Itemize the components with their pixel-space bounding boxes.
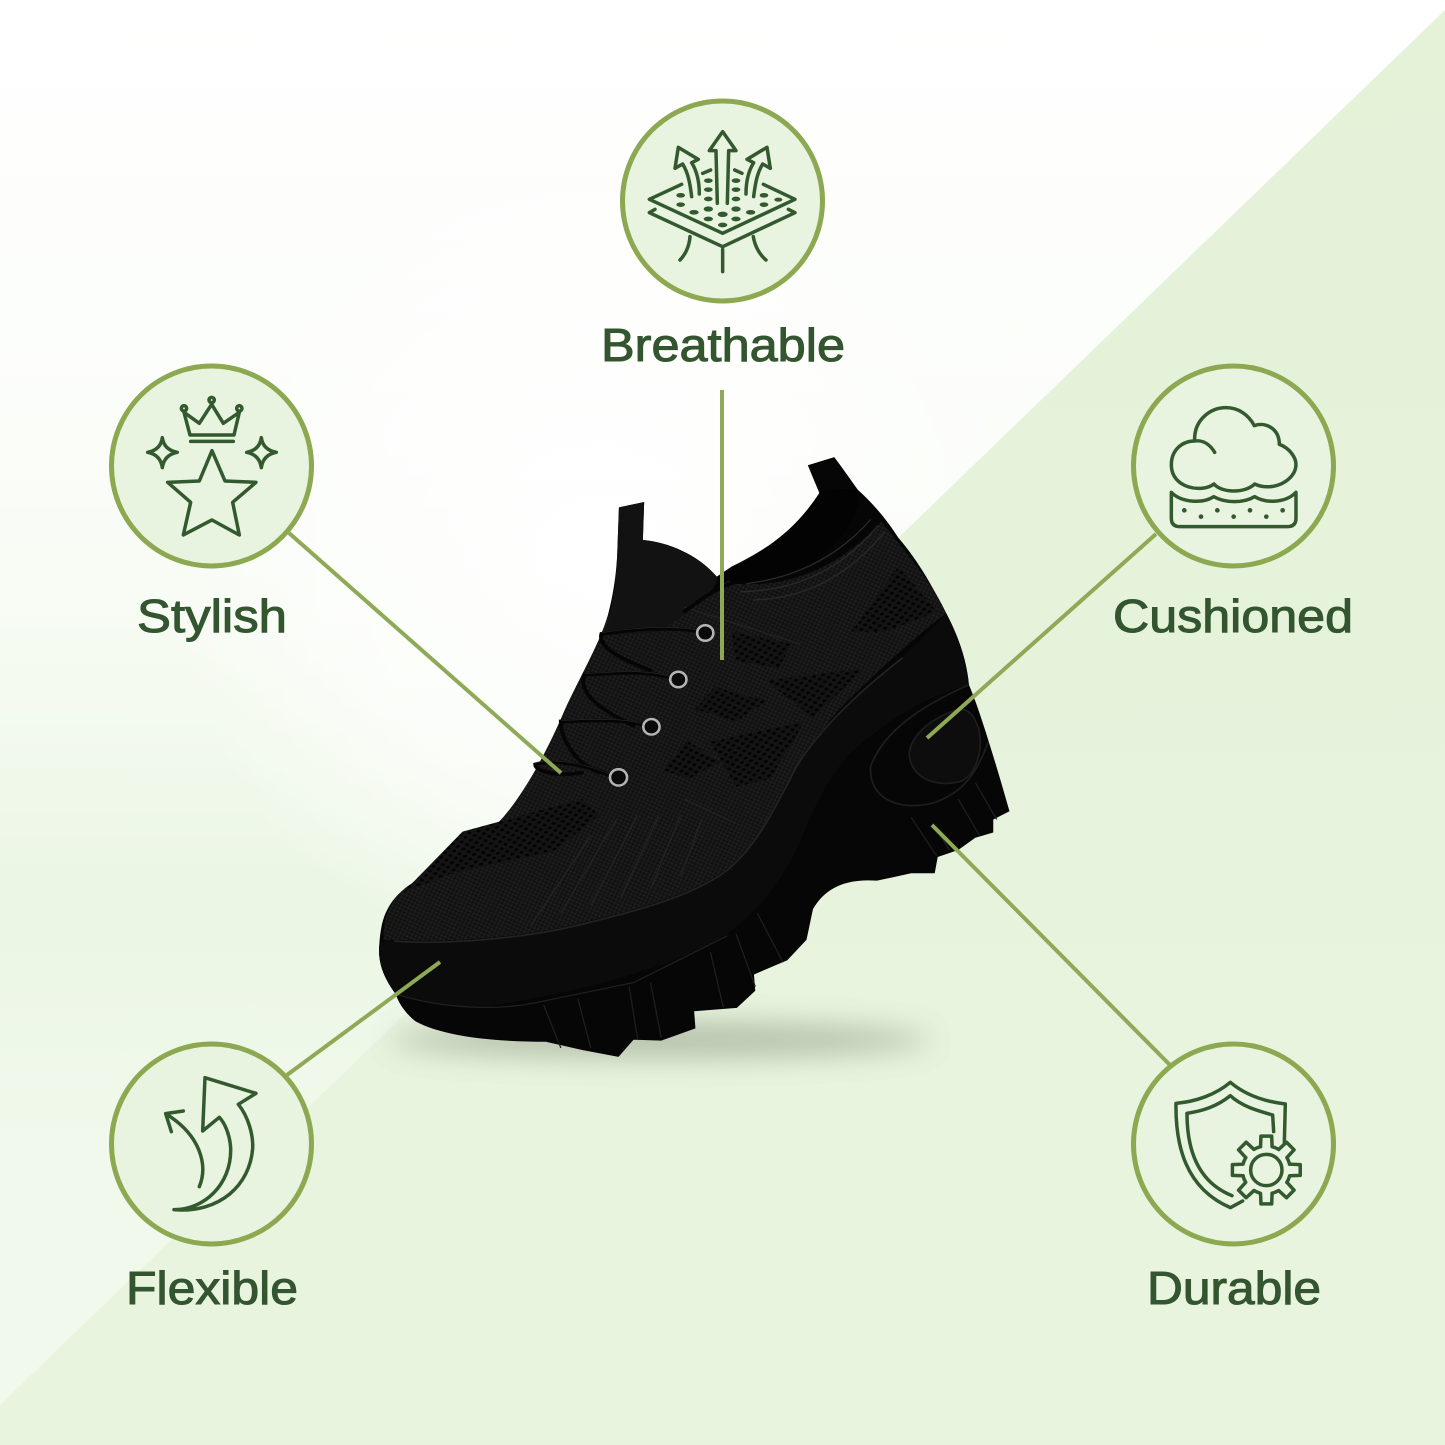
icon: crown, star and sparkles	[148, 397, 276, 535]
icon: breathable fabric with arrows	[649, 132, 795, 272]
laces	[535, 582, 745, 777]
panel: Breathable	[601, 101, 845, 371]
panel: Flexible	[112, 1044, 312, 1314]
panel: Stylish	[112, 366, 312, 642]
label: Flexible	[126, 1262, 298, 1314]
shoe silhouette	[379, 457, 1009, 1057]
tongue	[604, 502, 717, 636]
badge circle	[1134, 1044, 1334, 1244]
icon: shield and gear	[1176, 1082, 1300, 1208]
connector: Cushioned	[927, 534, 1156, 738]
icon: cloud over foam	[1171, 408, 1296, 527]
toe stripes	[531, 607, 800, 926]
connector: Stylish	[289, 533, 561, 773]
leaf knit patches	[663, 566, 937, 787]
connector: Breathable	[720, 390, 724, 660]
midsole highlight	[394, 658, 903, 942]
toe perforations	[403, 799, 599, 893]
shoe photo illustration	[379, 457, 1009, 1057]
label: Cushioned	[1113, 590, 1353, 642]
collar opening	[727, 489, 858, 583]
connector: Durable	[932, 825, 1170, 1065]
panel: Durable	[1134, 1044, 1334, 1314]
label: Breathable	[601, 319, 845, 371]
badge circle	[112, 1044, 312, 1244]
connector: Flexible	[287, 962, 440, 1075]
shoe shadow	[390, 1022, 930, 1058]
icon: flexing arrows	[166, 1078, 256, 1210]
eyelets	[610, 625, 713, 786]
heel oval	[871, 685, 988, 806]
badge circle	[622, 101, 822, 301]
lace highlights	[535, 627, 702, 775]
collar ribbing	[732, 520, 885, 600]
badge circle	[1134, 366, 1334, 566]
label: Durable	[1147, 1262, 1321, 1314]
knit upper	[384, 522, 946, 941]
outsole lugs	[398, 783, 997, 1048]
label: Stylish	[137, 590, 287, 642]
badge circle	[112, 366, 312, 566]
midsole band	[379, 613, 969, 1007]
panel: Cushioned	[1113, 366, 1353, 642]
